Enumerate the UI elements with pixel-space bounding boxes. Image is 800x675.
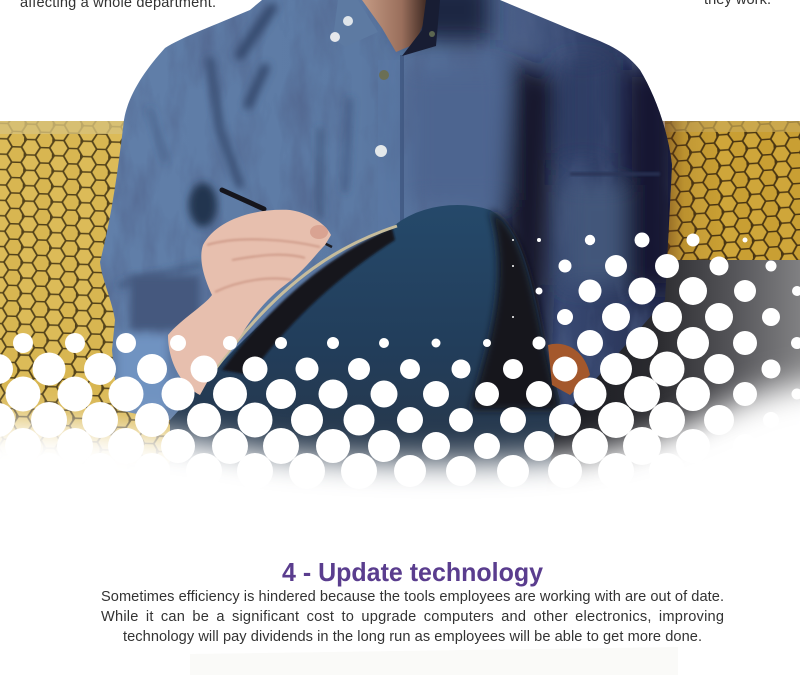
photo: man writing on a yellow sofa (0, 0, 800, 486)
text block: body paragraph: technology will pay dividends in the long run as employees will be able to get more done. (123, 629, 702, 645)
text block: body paragraph (101, 589, 724, 645)
collar (333, 0, 378, 47)
text block: body paragraph: While it can be a significant cost to upgrade computers and other electronics, improving (101, 609, 724, 625)
dark jeans shadow (470, 210, 560, 410)
text block: body paragraph: Sometimes efficiency is hindered because the tools employees are working with are out of date. (101, 589, 724, 605)
halftone dots (0, 232, 800, 489)
grey floor right (540, 260, 800, 500)
man's shirt (95, 0, 680, 420)
hand (168, 210, 331, 395)
chest light and dark areas (400, 0, 675, 360)
notebook (216, 226, 397, 375)
sofa right (660, 121, 800, 266)
shirt buttons (330, 16, 435, 157)
placket (378, 60, 402, 230)
dark collar edge (402, 0, 440, 56)
soft page fade (0, 375, 800, 600)
pen (222, 190, 332, 247)
heading: 4 - Update technology: 4 - Update technology (282, 557, 544, 587)
neck (362, 0, 428, 52)
faint photo remnant at bottom (190, 647, 678, 675)
right hand (548, 344, 590, 395)
jeans knee (170, 205, 560, 530)
sofa left (0, 121, 170, 521)
